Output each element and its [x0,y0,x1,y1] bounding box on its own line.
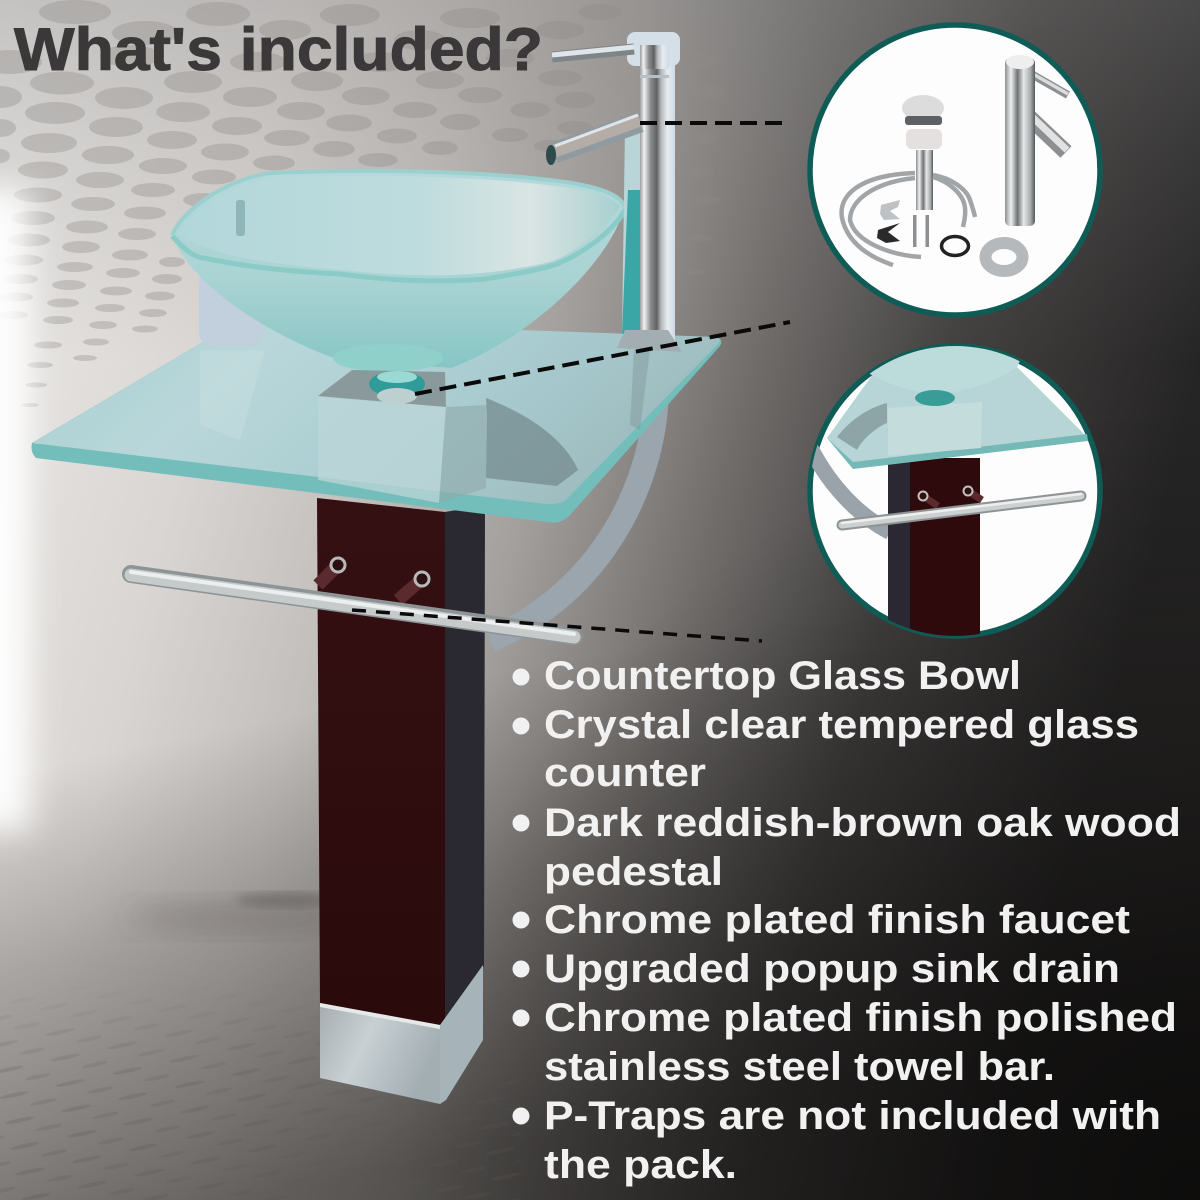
feature list [512,654,1181,1187]
background dot pattern [0,0,724,407]
bullet item: towel bar [512,996,1177,1089]
bowl drain mount [318,370,446,407]
detail towel bar [842,494,1081,525]
pedestal [317,498,485,1030]
detail pipe [812,444,888,539]
detail pedestal [888,458,980,642]
faucet [546,32,682,352]
towel bar [131,572,574,637]
glass bowl [172,171,625,372]
soft white left edge [0,190,30,830]
towel bar brackets [318,558,429,600]
glass counter [32,320,721,523]
soap dispenser [199,270,263,346]
dashed leader lines [352,123,790,641]
bullet item: tempered glass counter: Crystal clear tempered glass [544,703,1139,747]
bullet item: countertop glass bowl: Countertop Glass Bowl [544,654,1021,698]
bullet item: oak wood pedestal [512,801,1181,894]
bullet item: popup drain: Upgraded popup sink drain [544,947,1120,991]
bullet item: oak wood pedestal: pedestal [544,850,723,894]
title: What's included? [14,16,543,83]
chrome pedestal base [320,965,483,1104]
bullet item: P-traps note: the pack. [544,1143,737,1187]
bullet item: tempered glass counter [512,703,1139,795]
detail glass counter [827,367,1087,466]
gaskets and bolts [877,200,929,247]
bullet item: tempered glass counter: counter [544,751,706,795]
bullet item: P-traps note: P-Traps are not included with [544,1094,1161,1138]
bullet item: oak wood pedestal: Dark reddish-brown oak wood [544,801,1181,845]
bullet item: towel bar: Chrome plated finish polished [544,996,1177,1040]
drain pipe [490,400,656,640]
mounting ring [986,243,1022,271]
detail mount and bowl [870,346,1020,456]
bullet item: chrome faucet: Chrome plated finish faucet [544,898,1130,942]
detail brackets [918,486,982,506]
flexible hoses [842,173,975,265]
bullet item: towel bar: stainless steel towel bar. [544,1045,1055,1089]
bullet item: P-traps note [512,1094,1161,1187]
faucet kit body [1005,55,1068,226]
sink illustration [32,32,721,1104]
callout: towel bar detail [800,340,1100,642]
rubber O-ring [942,236,968,256]
callout: faucet and drain kit [810,25,1100,315]
pop-up drain [902,95,944,210]
